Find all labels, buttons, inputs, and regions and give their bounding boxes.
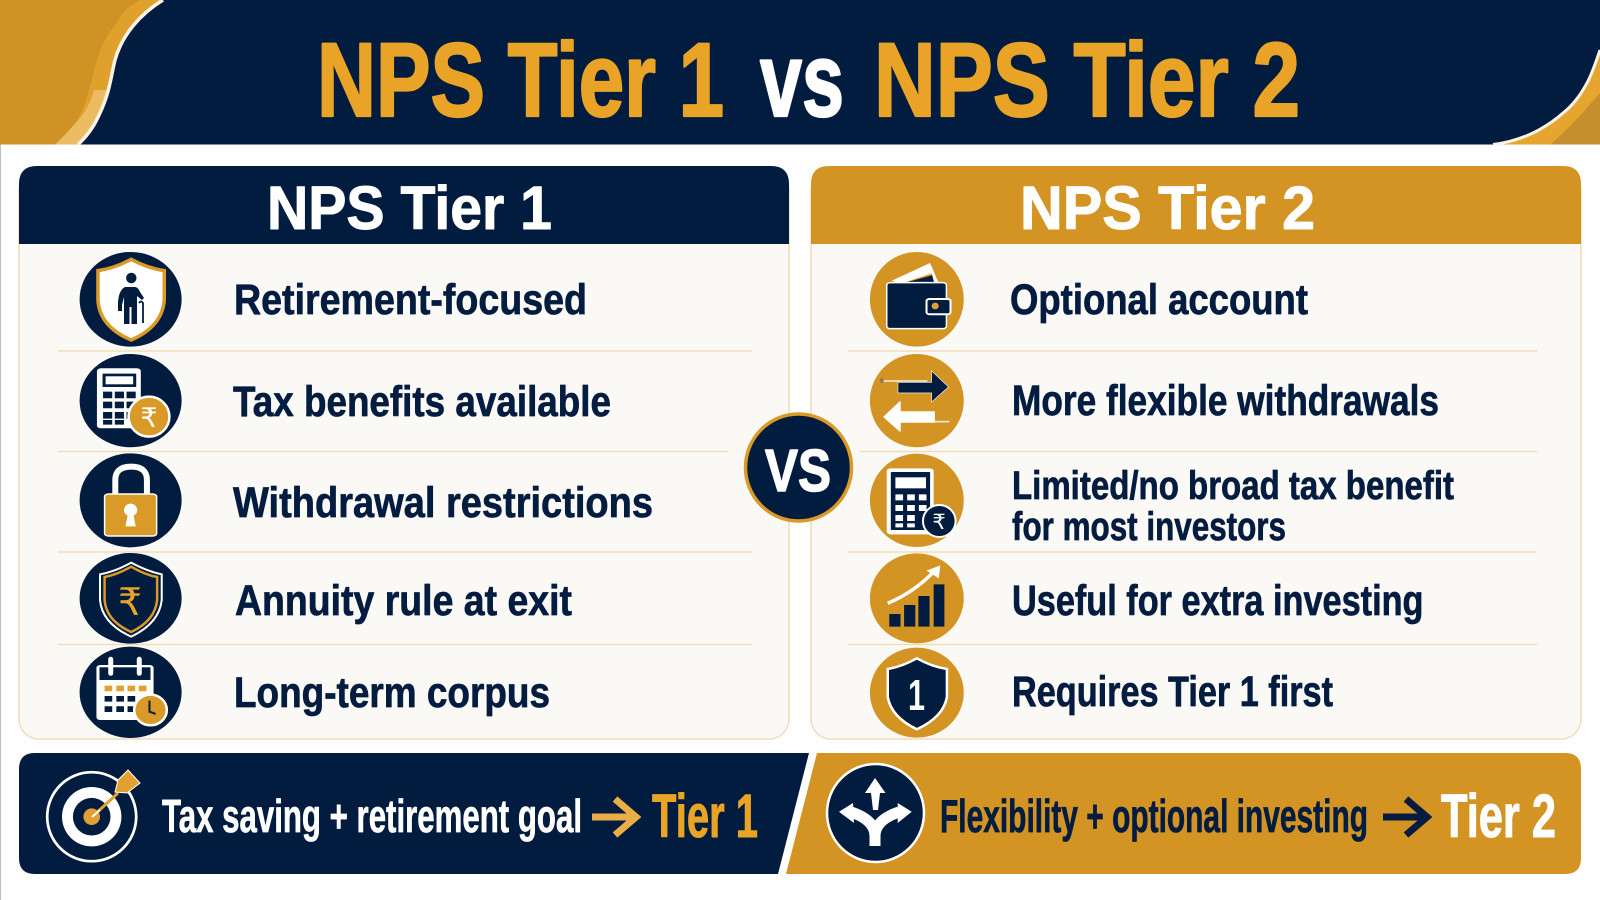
row: Requires Tier 1 first: Requires Tier 1 first <box>1012 668 1333 716</box>
summary bar: Tier 2 <box>786 753 1581 874</box>
icon: two-way arrows <box>870 354 964 447</box>
row: Optional account: Optional account <box>1010 276 1308 324</box>
row: Retirement-focused <box>80 252 587 347</box>
icon: rupee shield <box>80 553 182 644</box>
summary bar: Tier 2: Tier 2 <box>1441 782 1556 850</box>
row: Long-term corpus <box>80 647 550 738</box>
row: Useful for extra investing: Useful for extra investing <box>1012 577 1424 625</box>
title: NPS Tier 1 <box>317 22 724 139</box>
row: Annuity rule at exit <box>80 553 572 644</box>
icon: growth chart <box>870 553 964 643</box>
panel: NPS Tier 2 <box>811 166 1581 739</box>
header banner <box>0 0 1600 144</box>
icon: shield with number 1 <box>870 648 964 738</box>
panel heading: NPS Tier 2: NPS Tier 2 <box>1020 174 1315 242</box>
row: More flexible withdrawals: More flexible withdrawals <box>1012 377 1439 425</box>
summary bar: Tier 2: Flexibility + optional investing <box>940 790 1368 842</box>
icon: calculator with navy rupee coin: ₹ <box>932 510 946 534</box>
text block: for most investors <box>1012 505 1286 549</box>
summary bar: Tier 1: Tax saving + retirement goal <box>162 790 582 842</box>
row: Useful for extra investing <box>870 553 1424 643</box>
arrow <box>1383 799 1427 835</box>
row: Withdrawal restrictions: Withdrawal restrictions <box>233 479 653 527</box>
text block <box>1012 464 1454 549</box>
text block: Limited/no broad tax benefit <box>1012 464 1454 508</box>
summary bar: Tier 1: Tier 1 <box>652 782 758 850</box>
row: Limited/no broad tax benefit for most investors <box>870 454 1454 549</box>
panel heading: NPS Tier 2 <box>811 166 1581 244</box>
icon: rupee shield: ₹ <box>118 580 142 624</box>
icon: calculator with rupee coin <box>80 354 182 447</box>
VS badge: VS <box>765 438 831 504</box>
title: NPS Tier 2 <box>874 22 1300 139</box>
VS badge <box>746 414 852 521</box>
panel heading: NPS Tier 1 <box>19 166 789 244</box>
decoration: left gold swoosh <box>0 0 163 144</box>
row: Tax benefits available: Tax benefits available <box>233 378 611 426</box>
row: Withdrawal restrictions <box>80 453 653 547</box>
row: Optional account <box>870 252 1308 347</box>
row: More flexible withdrawals <box>870 354 1439 447</box>
panel: NPS Tier 1 <box>19 166 789 739</box>
panel heading: NPS Tier 1: NPS Tier 1 <box>267 174 552 242</box>
icon: shield with number 1: 1 <box>908 671 925 720</box>
icon: wallet <box>870 252 964 347</box>
row: Annuity rule at exit: Annuity rule at exit <box>235 577 572 625</box>
arrow <box>592 799 636 835</box>
icon: calendar with clock <box>80 647 182 738</box>
icon: padlock <box>80 453 182 547</box>
row: Tax benefits available <box>80 354 611 447</box>
summary bar: Tier 1 <box>19 753 809 874</box>
title: vs <box>760 22 844 139</box>
icon: diverging route arrows <box>827 764 924 862</box>
title <box>317 22 1300 139</box>
row: Long-term corpus: Long-term corpus <box>234 669 550 717</box>
row: Requires Tier 1 first <box>870 648 1333 738</box>
icon: shield with retiree <box>80 252 182 347</box>
row: Retirement-focused: Retirement-focused <box>234 276 587 324</box>
decoration: right gold swoosh <box>1493 50 1600 144</box>
icon: calculator with navy rupee coin <box>870 454 964 547</box>
icon: target with arrow <box>47 770 140 861</box>
icon: calculator with rupee coin: ₹ <box>140 403 158 434</box>
